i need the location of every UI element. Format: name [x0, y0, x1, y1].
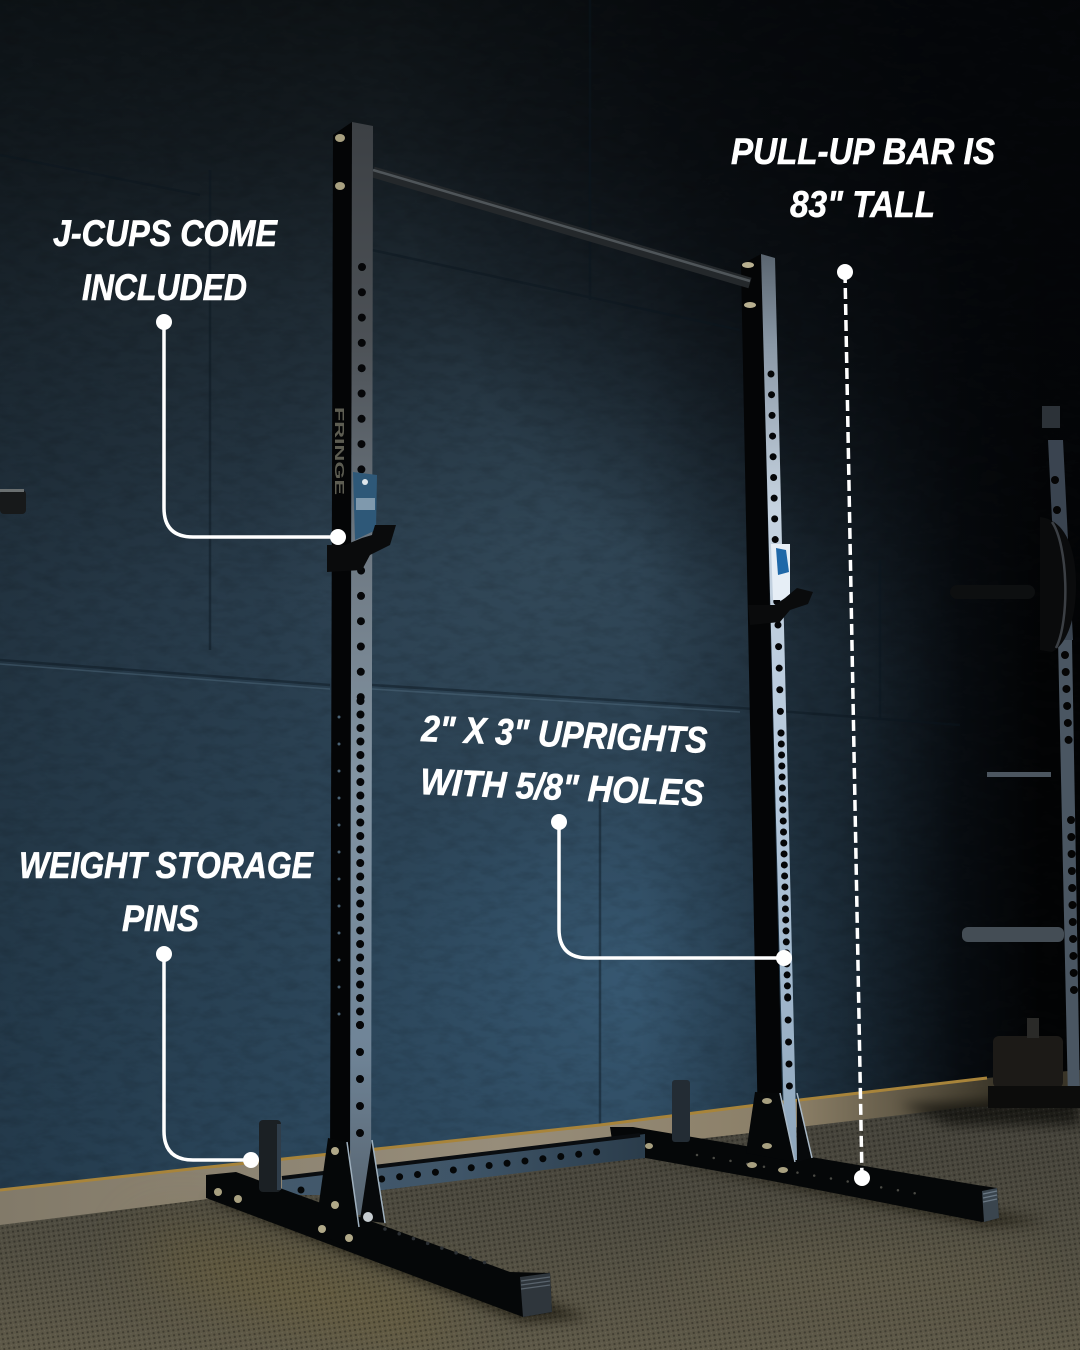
left storage pin [259, 1120, 281, 1192]
left gusset plates [318, 1138, 385, 1250]
left upright [330, 122, 373, 1215]
leader line to J-cup [156, 314, 346, 545]
right upright [741, 254, 797, 1160]
heading: uprights: 2" X 3" UPRIGHTS [420, 708, 708, 761]
heading: J-cups: INCLUDED [82, 267, 247, 308]
callout: pull-up bar height [731, 131, 995, 1186]
leader line to pin [156, 946, 259, 1168]
left foot [206, 1172, 552, 1317]
callout: uprights [418, 708, 792, 966]
callout: weight storage pins [19, 845, 314, 1168]
left J-cup [327, 472, 396, 572]
right foot [610, 1127, 999, 1222]
heading: weight storage: WEIGHT STORAGE [19, 845, 314, 886]
heading: uprights [418, 708, 708, 814]
dashed height line [837, 264, 870, 1186]
right gusset plates [645, 1092, 812, 1173]
leader line to upright [551, 814, 792, 966]
FRINGE logo: FRINGE [332, 407, 347, 496]
heading: pull-up bar [731, 131, 995, 225]
heading: pull-up bar: 83" TALL [790, 184, 935, 225]
right storage pin [672, 1080, 690, 1142]
floor [0, 1070, 1080, 1350]
cross beam [282, 1134, 645, 1195]
heading: weight storage [19, 845, 314, 939]
heading: uprights: WITH 5/8" HOLES [419, 761, 705, 814]
heading: weight storage: PINS [122, 898, 199, 939]
background rack at right edge [950, 406, 1080, 1108]
heading: pull-up bar: PULL-UP BAR IS [731, 131, 995, 172]
left edge bar stub [0, 489, 26, 514]
heading: J-cups [53, 213, 278, 308]
heading: J-cups: J-CUPS COME [53, 213, 278, 254]
pull-up bar [373, 170, 750, 283]
callout: J-cups [53, 213, 346, 545]
right J-cup [748, 544, 813, 625]
squat rack [206, 122, 999, 1317]
